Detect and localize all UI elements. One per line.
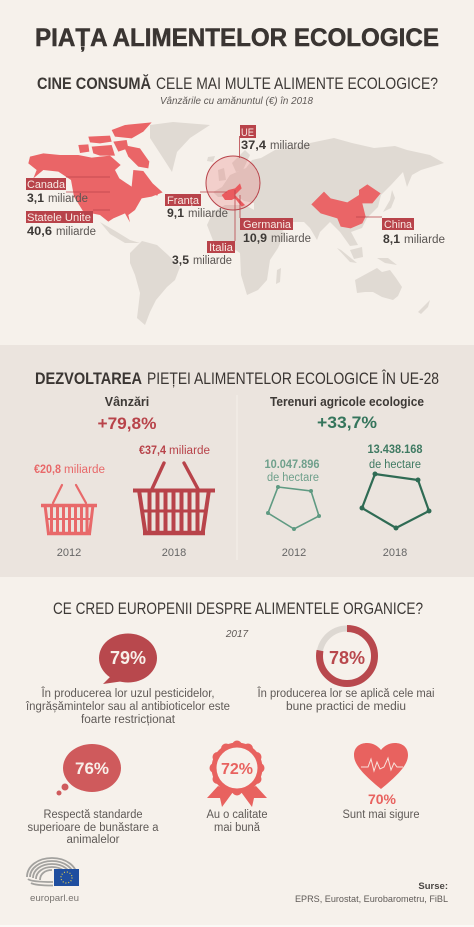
stat: 70 percent heart: Sunt mai sigure	[342, 809, 420, 821]
stat: 72 percent rosette: 72%	[221, 761, 253, 778]
value: farmland 2018	[368, 444, 423, 471]
sources: EPRS, Eurostat, Eurobarometru, FiBL	[295, 894, 448, 905]
label: United States: 40,6	[27, 226, 52, 238]
value: farmland 2018: de hectare	[369, 459, 421, 471]
label: France: miliarde	[188, 208, 228, 220]
value: sales 2012: miliarde	[64, 464, 105, 476]
value: sales 2012: €20,8	[34, 464, 62, 476]
logo: European Parliament: europarl.eu	[30, 893, 79, 904]
label: France	[165, 194, 228, 220]
label: United States	[26, 211, 96, 238]
stat: 76 percent thought bubble: animalelor	[66, 834, 120, 846]
label: France: Franța	[167, 195, 200, 207]
title: PIAȚA ALIMENTELOR ECOLOGICE	[35, 24, 439, 52]
stat: 78 percent ring: În producerea lor se aplică cele mai	[257, 687, 434, 700]
text: year 2018 farmland: 2018	[383, 547, 407, 559]
value: farmland 2012	[264, 459, 320, 484]
value: sales 2012	[34, 464, 105, 476]
text: year 2012 farmland: 2012	[282, 547, 306, 559]
label: Germany: 10,9	[243, 233, 267, 245]
stat: 72 percent rosette: mai bună	[214, 822, 261, 834]
label: EU: miliarde	[270, 140, 310, 152]
sources	[295, 881, 448, 905]
stat: 79 percent speech bubble: îngrășămintelor sau al antibioticelor este	[25, 701, 230, 713]
stat: 78 percent ring: 78%	[329, 648, 365, 668]
value: sales 2018: €37,4	[139, 445, 167, 457]
label: Germany: Germania	[243, 219, 292, 231]
label: Canada: miliarde	[48, 193, 88, 205]
heading: market development	[35, 369, 439, 388]
icon: large basket 2018	[133, 463, 215, 534]
icon: large field 2018	[360, 472, 432, 530]
label: Canada: Canada	[27, 179, 66, 191]
stat: 79 percent speech bubble: În producerea lor uzul pesticidelor,	[41, 687, 214, 700]
label: Italy: Italia	[209, 242, 234, 254]
stat: 79 percent speech bubble: foarte restricționat	[81, 714, 176, 726]
label: Canada	[26, 178, 88, 205]
sales heading: Vânzări	[105, 395, 149, 409]
label: United States: Statele Unite	[27, 212, 91, 224]
value: farmland 2012: de hectare	[267, 472, 319, 484]
farmland heading	[270, 395, 424, 432]
map: North America highlighted	[28, 122, 163, 222]
stat: 78 percent ring: bune practici de mediu	[286, 701, 406, 713]
heading: who consumes: CINE CONSUMĂ	[37, 74, 151, 93]
world map	[28, 122, 444, 325]
stat: 70 percent heart	[342, 743, 420, 821]
label: France: 9,1	[167, 208, 185, 220]
stat: 76 percent thought bubble: Respectă standarde	[44, 809, 142, 821]
map: China highlighted	[311, 184, 381, 228]
value: farmland 2018: 13.438.168	[368, 444, 423, 456]
label: Germany	[240, 218, 311, 245]
stat: 70 percent heart: 70%	[368, 791, 397, 807]
stat: 76 percent thought bubble: superioare de bunăstare a	[28, 822, 159, 834]
label: EU: UE	[241, 127, 254, 139]
sources: Surse:	[418, 881, 448, 892]
stat: 76 percent thought bubble	[28, 744, 159, 846]
value: sales 2018: miliarde	[169, 445, 210, 457]
label: United States: miliarde	[56, 226, 96, 238]
farmland heading: Terenuri agricole ecologice	[270, 395, 424, 409]
icon: small field 2012	[266, 485, 321, 531]
stat: 78 percent ring	[257, 628, 434, 713]
stat: 76 percent thought bubble: 76%	[75, 759, 109, 778]
label: China	[382, 218, 445, 246]
stat: 79 percent speech bubble	[25, 634, 230, 726]
label: China: 8,1	[383, 234, 401, 246]
label: Italy	[172, 241, 235, 267]
label: Italy: 3,5	[172, 255, 190, 267]
heading: market development: DEZVOLTAREA	[35, 369, 142, 388]
label: China: miliarde	[404, 234, 445, 246]
heading: who consumes	[37, 74, 438, 93]
text: year 2012 sales: 2012	[57, 547, 81, 559]
sales heading	[98, 395, 156, 433]
value: sales 2018	[139, 445, 210, 457]
label: China: China	[384, 219, 413, 231]
panel: market growth	[0, 345, 474, 577]
icon: small basket 2012	[41, 485, 97, 534]
subtitle: retail sales: Vânzările cu amănuntul (€) în 2018	[160, 96, 313, 107]
stat: 72 percent rosette	[206, 740, 268, 834]
sales heading: +79,8%	[98, 414, 156, 433]
label: EU: 37,4	[241, 140, 267, 152]
stat: 79 percent speech bubble: 79%	[110, 648, 146, 668]
text: year 2018 sales: 2018	[162, 547, 186, 559]
farmland heading: +33,7%	[317, 413, 377, 432]
map: leader lines	[66, 136, 382, 241]
label: Canada: 3,1	[27, 193, 45, 205]
stat: 72 percent rosette: Au o calitate	[206, 809, 268, 821]
label: Italy: miliarde	[193, 255, 232, 267]
label: EU	[240, 125, 310, 152]
value: farmland 2012: 10.047.896	[264, 459, 320, 471]
text: year 2017: 2017	[225, 629, 249, 640]
logo: European Parliament	[27, 858, 79, 904]
label: Germany: miliarde	[271, 233, 311, 245]
map: EU magnifier circle	[206, 156, 260, 210]
